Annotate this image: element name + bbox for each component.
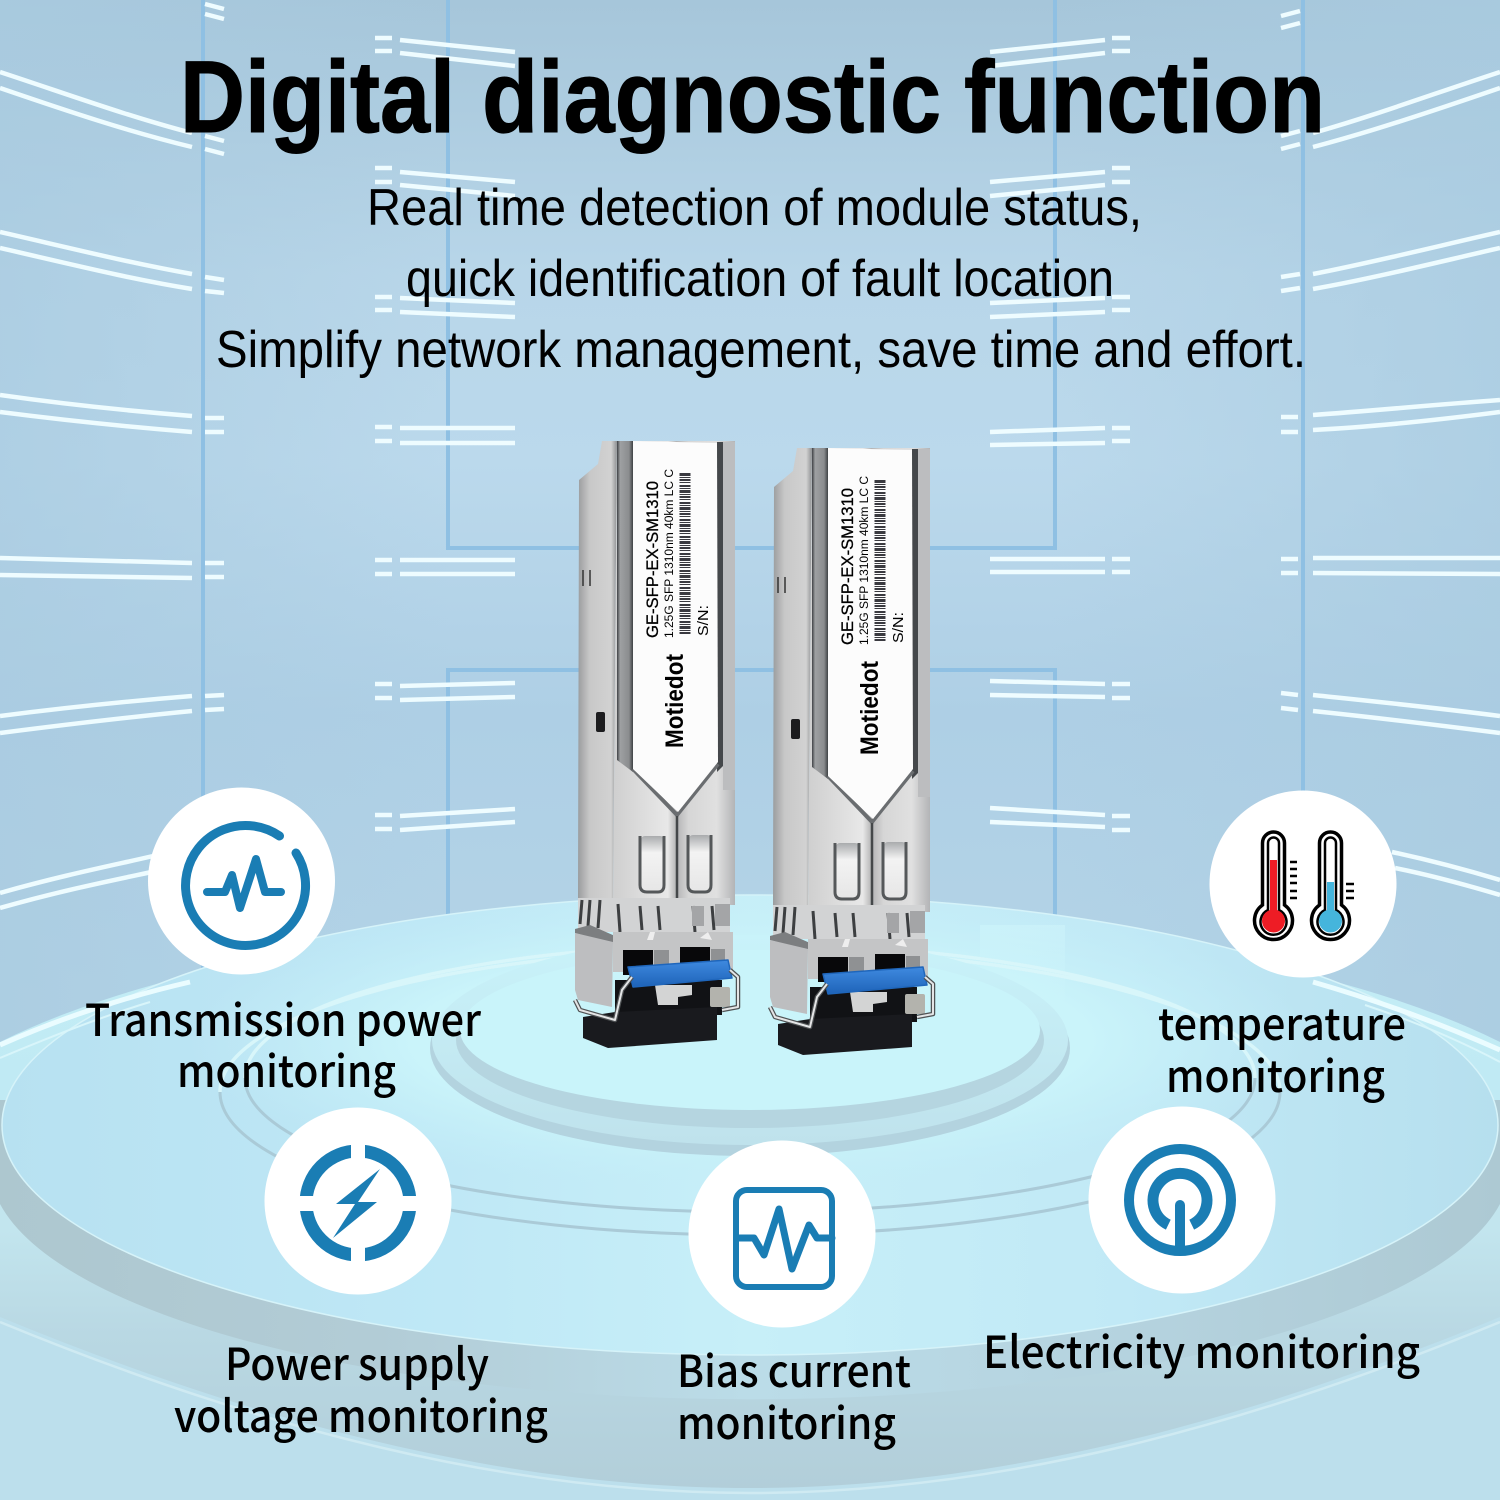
label: power supply voltage monitoring xyxy=(174,1329,548,1445)
label: electricity monitoring: Electricity monitoring xyxy=(983,1317,1420,1381)
label: bias current monitoring xyxy=(677,1336,911,1452)
product: SFP module 2 xyxy=(770,448,933,1055)
product: SFP module 2: Motiedot xyxy=(856,660,884,755)
background: wall xyxy=(0,0,1500,1100)
label: power supply voltage monitoring: voltage monitoring xyxy=(174,1381,548,1445)
background: wall panel lines xyxy=(203,0,1303,1000)
product: SFP module 1: Motiedot xyxy=(661,653,689,748)
background: white light strips xyxy=(0,4,1500,908)
product: SFP module 1 xyxy=(575,441,738,1048)
label: transmission power monitoring xyxy=(85,985,482,1100)
label: temperature monitoring: monitoring xyxy=(1166,1041,1385,1105)
product: SFP module 2: 1.25G SFP 1310nm 40km LC C xyxy=(859,476,871,645)
icon: thermometers xyxy=(1210,790,1396,978)
icon: transmission power pulse ring xyxy=(148,788,335,974)
subtitle text block: Simplify network management, save time and effort. xyxy=(216,320,1306,378)
label: bias current monitoring: monitoring xyxy=(677,1388,896,1452)
title: diagnostic xyxy=(482,40,941,154)
icon: bias current waveform xyxy=(688,1140,876,1328)
product: SFP module 1: GE-SFP-EX-SM1310 xyxy=(643,481,662,638)
subtitle text block xyxy=(216,178,1306,378)
title xyxy=(180,40,1325,154)
title: function xyxy=(964,40,1325,154)
product: SFP module 2: GE-SFP-EX-SM1310 xyxy=(838,488,857,645)
product: SFP module 2: S/N: xyxy=(890,612,907,643)
icon: electricity power signal xyxy=(1088,1106,1276,1294)
label: transmission power monitoring: Transmission power xyxy=(85,985,482,1049)
label: bias current monitoring: Bias current xyxy=(677,1336,911,1400)
title: Digital xyxy=(180,40,455,154)
label: temperature monitoring xyxy=(1158,989,1406,1105)
product: SFP module 1: 1.25G SFP 1310nm 40km LC C xyxy=(664,469,676,638)
icon: power supply voltage bolt ring xyxy=(264,1108,452,1294)
platform: stacked round stage xyxy=(0,890,1500,1500)
label: temperature monitoring: temperature xyxy=(1158,989,1406,1053)
product: SFP module 1: S/N: xyxy=(695,605,712,636)
subtitle text block: Real time detection of module status, xyxy=(367,178,1142,236)
label: transmission power monitoring: monitoring xyxy=(177,1036,396,1100)
subtitle text block: quick identification of fault location xyxy=(406,249,1114,307)
label: power supply voltage monitoring: Power supply xyxy=(225,1329,489,1393)
